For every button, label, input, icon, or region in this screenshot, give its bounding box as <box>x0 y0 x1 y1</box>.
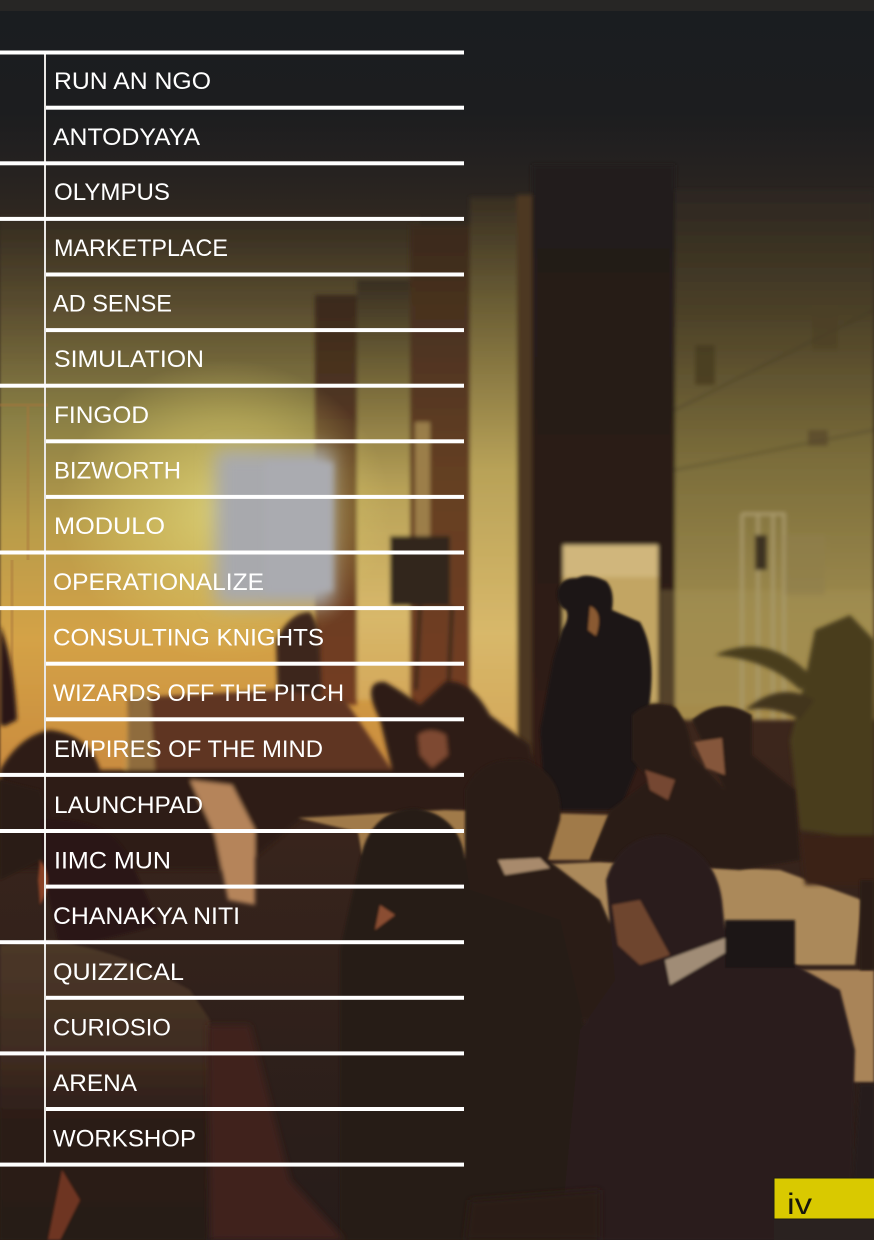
event names: IIMC MUN <box>54 848 171 874</box>
event names: EMPIRES OF THE MIND <box>54 736 323 763</box>
photo: speaker cabinet <box>390 536 450 606</box>
event names: WORKSHOP <box>53 1126 196 1152</box>
event names: OLYMPUS <box>54 179 170 206</box>
photo: potted palm <box>715 615 874 885</box>
event names: OPERATIONALIZE <box>53 569 264 596</box>
photo: big round table <box>465 862 862 968</box>
event names: SIMULATION <box>54 346 204 373</box>
photo: right round table <box>790 970 874 1082</box>
photo: pillars and cream walls <box>315 165 874 810</box>
event names: QUIZZICAL <box>53 959 184 986</box>
photo: left speaker and seated crowd at mid-left <box>0 612 540 905</box>
event names: MARKETPLACE <box>54 235 228 262</box>
event names <box>53 68 344 1152</box>
event names: CHANAKYA NITI <box>53 903 240 930</box>
event names: MODULO <box>54 513 165 540</box>
event names: BIZWORTH <box>54 458 181 484</box>
photo: foreground delegates <box>0 759 874 1240</box>
event names: WIZARDS OFF THE PITCH <box>53 680 344 707</box>
photo: standing men <box>540 576 652 810</box>
photo: patterned carpet <box>208 1025 345 1240</box>
horizontal rules <box>0 50 464 1167</box>
page number text: iv <box>787 1188 812 1221</box>
panel: event list <box>0 50 464 1167</box>
photo: left wall <box>0 215 420 780</box>
page number tag <box>774 1178 874 1221</box>
photo: small round table <box>298 810 610 860</box>
event names: CURIOSIO <box>53 1014 171 1042</box>
event names: AD SENSE <box>53 290 172 318</box>
event names: RUN AN NGO <box>54 68 211 95</box>
vertical divider <box>44 52 46 1166</box>
photo: projector screen <box>215 450 332 605</box>
event names: ARENA <box>53 1070 138 1097</box>
event names: LAUNCHPAD <box>54 792 203 819</box>
photo: banner stand <box>563 545 658 703</box>
photo: seated men at back <box>590 704 800 870</box>
event names: FINGOD <box>54 402 149 429</box>
event names: CONSULTING KNIGHTS <box>53 624 324 652</box>
event names: ANTODYAYA <box>53 124 201 151</box>
photo: projected light glow <box>60 360 390 660</box>
photo: lower right shadow <box>465 1190 600 1240</box>
photo: metal stand <box>742 514 784 720</box>
